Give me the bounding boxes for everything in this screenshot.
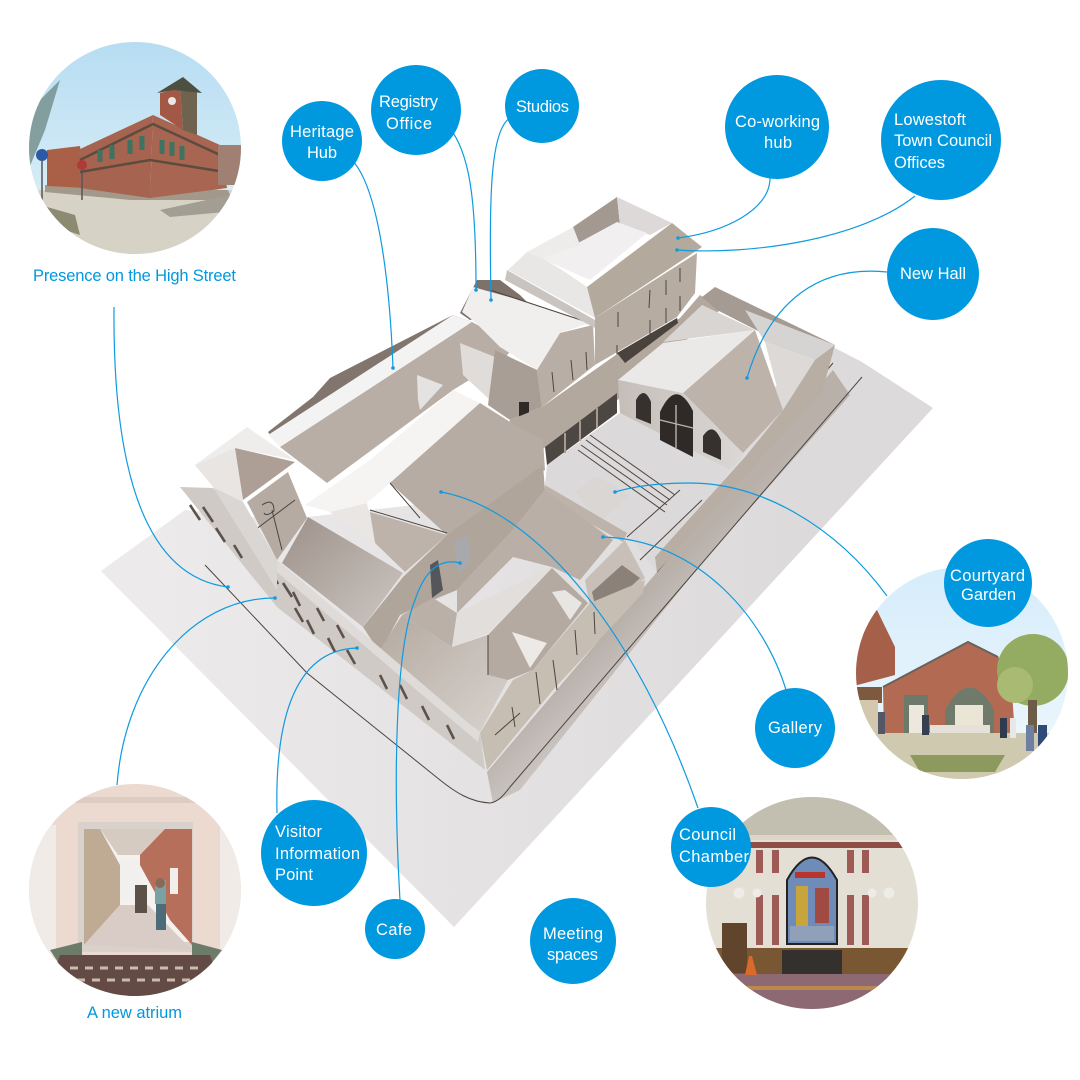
bubble: co-working hub: hub — [764, 134, 792, 152]
bubble: heritage hub: Heritage — [290, 123, 354, 141]
bubble: meeting spaces — [530, 898, 616, 984]
hall arched windows — [636, 393, 651, 424]
base cut lines — [205, 377, 862, 803]
bubble: meeting spaces: Meeting — [543, 925, 603, 943]
bubble: lowestoft town council offices: Town Council — [894, 132, 992, 150]
bubble: registry office: Registry — [379, 93, 439, 111]
chamber side windows — [454, 535, 470, 575]
photo: courtyard garden — [856, 568, 1068, 779]
bubble: heritage hub — [282, 101, 362, 181]
bubble: lowestoft town council offices: Lowestoft — [894, 111, 966, 129]
rear white strip — [268, 315, 472, 447]
bubble: new hall — [887, 228, 979, 320]
courtyard low wall — [545, 485, 627, 542]
bubble: registry office: Office — [386, 115, 432, 133]
new hall — [618, 287, 835, 572]
main council chamber roof — [305, 390, 545, 653]
courtyard steps — [578, 435, 702, 560]
main facade — [180, 487, 485, 770]
studios roof — [460, 280, 530, 320]
facade windows — [190, 505, 454, 739]
front lower roofs — [378, 490, 613, 732]
bubble: meeting spaces: spaces — [547, 946, 598, 964]
bubble: gallery: Gallery — [768, 719, 823, 737]
link block — [505, 295, 720, 470]
bubble: visitor information point: Information — [275, 845, 360, 863]
bubble: visitor information point: Point — [275, 866, 313, 884]
bubble: co-working hub: Co-working — [735, 113, 820, 131]
bubble: heritage hub: Hub — [307, 144, 337, 162]
bubble: new hall: New Hall — [900, 265, 966, 283]
base shadow — [487, 370, 850, 803]
photo: presence on the high street — [29, 42, 241, 254]
courtyard glazing — [545, 393, 617, 465]
tower — [195, 427, 307, 590]
bubble: courtyard garden — [944, 539, 1032, 627]
bubble: lowestoft town council offices — [881, 80, 1001, 200]
photo: council chamber — [706, 797, 918, 1009]
bubble: visitor information point: Visitor — [275, 823, 322, 841]
rear parapet — [268, 315, 472, 440]
bubble: registry office — [371, 65, 461, 155]
label: presence on the high street: Presence on the High Street — [33, 267, 236, 285]
bubble: visitor information point — [261, 800, 367, 906]
model base board — [101, 347, 933, 927]
glazed gallery box — [585, 540, 645, 622]
rear long roof: heritage hub — [280, 322, 515, 483]
left courtyard roof — [282, 517, 403, 627]
bubble: lowestoft town council offices: Offices — [894, 154, 945, 172]
bubble: courtyard garden: Garden — [961, 586, 1016, 604]
end gable wall — [480, 580, 645, 770]
bubble: council chamber: Council — [679, 826, 736, 844]
bubble: cafe — [365, 899, 425, 959]
bubble: co-working hub — [725, 75, 829, 179]
facade parapet band — [277, 560, 480, 742]
architectural card model — [101, 197, 933, 927]
label: a new atrium: A new atrium — [87, 1004, 182, 1022]
leader lines — [114, 118, 915, 900]
co-working block — [505, 197, 702, 365]
skylight — [617, 318, 678, 363]
bubble: studios: Studios — [516, 98, 569, 116]
photo: a new atrium — [29, 784, 241, 996]
bubble: studios — [505, 69, 579, 143]
mid gabled wall — [537, 325, 595, 407]
bubble: gallery — [755, 688, 835, 768]
bubble: cafe: Cafe — [376, 921, 412, 939]
bubble: council chamber — [671, 807, 751, 887]
bubble: courtyard garden: Courtyard — [950, 567, 1025, 585]
bubble: council chamber: Chamber — [679, 848, 750, 866]
courtyard floor — [545, 413, 730, 572]
